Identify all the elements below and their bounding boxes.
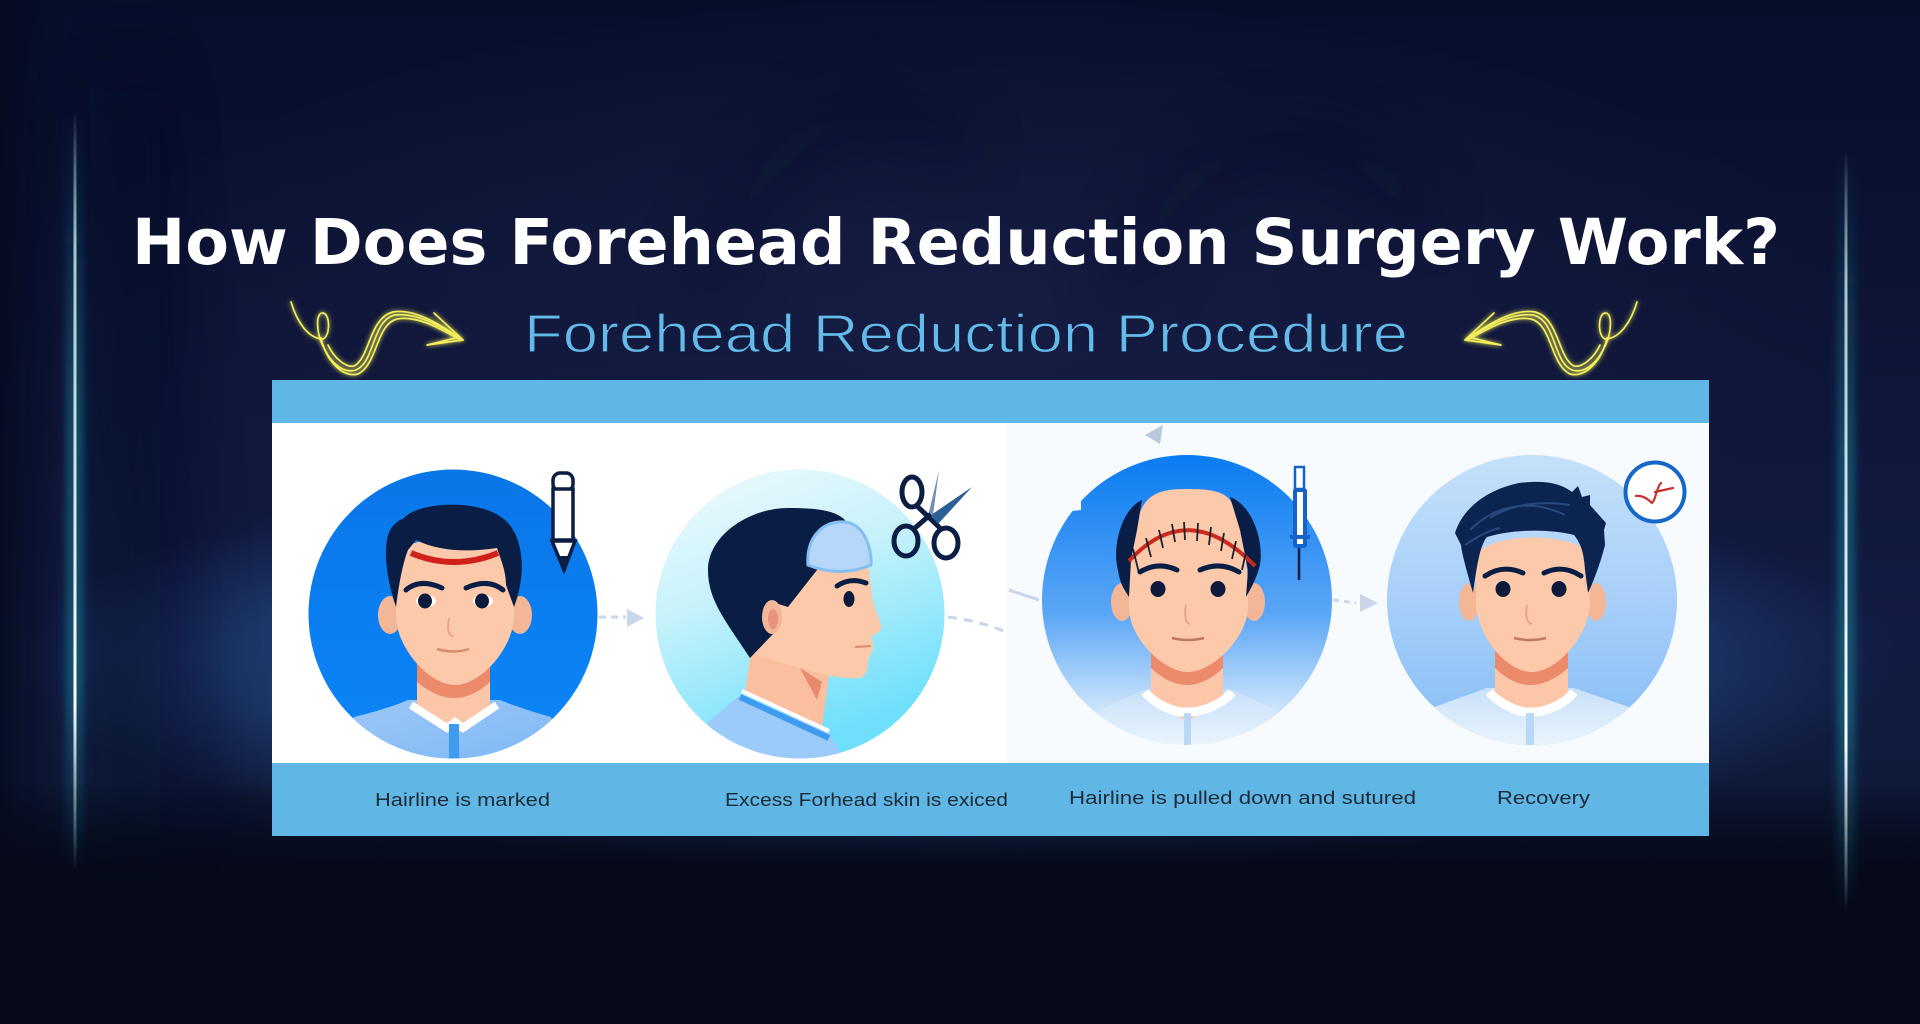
step 4: recovery portrait [1387, 455, 1677, 760]
title: How Does Forehead Reduction Surgery Work? [132, 206, 1780, 279]
arrow: yellow squiggle left [291, 302, 463, 375]
subtitle: Forehead Reduction Procedure [524, 304, 1408, 364]
panel: procedure steps [272, 380, 1709, 836]
icon: syringe [1290, 467, 1310, 580]
step 2: excess skin excised portrait [656, 470, 944, 770]
step 3: hairline sutured portrait [1042, 455, 1332, 760]
arrow: yellow squiggle right [1465, 302, 1637, 375]
arrow: step 1 to step 2 [599, 609, 644, 627]
step 1: hairline marked portrait [308, 470, 598, 770]
icon: recovery check badge [1626, 462, 1684, 522]
icon: marker pen [552, 473, 575, 570]
arrow: step 3 to step 4 [1333, 594, 1378, 612]
icon: scissors [894, 470, 972, 558]
arrow: step 2 to step 3 [948, 425, 1163, 632]
glowing vertical line left [66, 110, 84, 870]
label: step 1: Hairline is marked [375, 790, 550, 810]
label: step 2: Excess Forhead skin is exiced [725, 790, 1008, 810]
label: step 4: Recovery [1497, 788, 1590, 808]
glowing vertical line right [1837, 150, 1855, 910]
label: step 3: Hairline is pulled down and sutured [1069, 788, 1416, 808]
